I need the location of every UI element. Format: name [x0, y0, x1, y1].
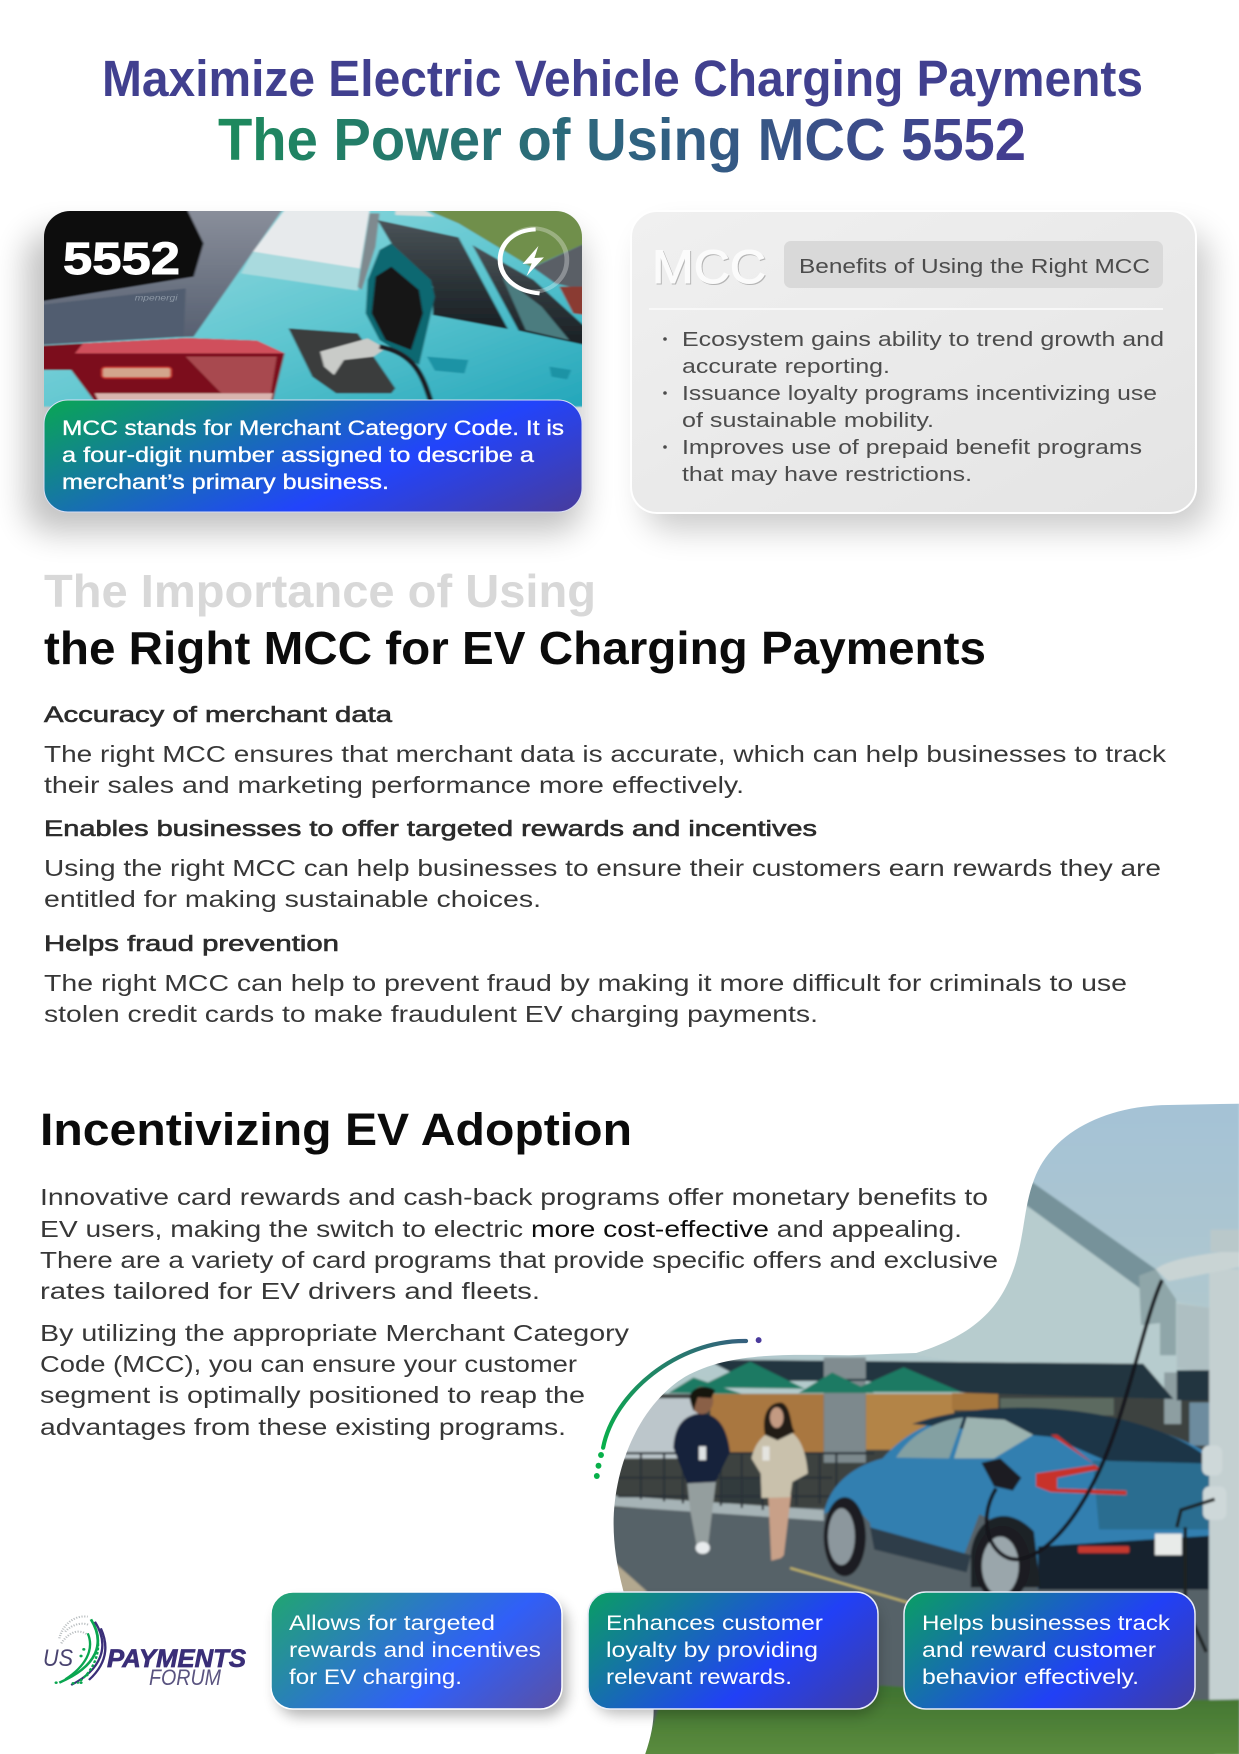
photo: car charging [40, 207, 589, 407]
text block: appropriate MCC: Code (MCC), you can ensure your customer [40, 1351, 577, 1377]
panel: what MCC stands for [26, 207, 589, 532]
card: targeted rewards: Allows for targeted [289, 1612, 495, 1635]
badge: 5552: 5552 [63, 233, 180, 284]
text block: card rewards: EV users, making the switch to electric more cost-effective and appealing. [40, 1216, 962, 1242]
benefits list: Ecosystem gains ability to trend growth and [682, 329, 1164, 351]
text block: appropriate MCC: advantages from these existing programs. [40, 1414, 566, 1440]
logo: US Payments Forum [43, 1616, 246, 1690]
benefits list: Improves use of prepaid benefit programs [682, 437, 1142, 459]
benefits list: that may have restrictions. [682, 464, 972, 486]
chip heading [784, 241, 1163, 288]
card: track and reward behavior [904, 1592, 1195, 1709]
callout: MCC definition: a four-digit number assigned to describe a [62, 444, 534, 467]
benefits list: Issuance loyalty programs incentivizing use [682, 383, 1157, 405]
MCC embossed label: MCC [653, 241, 767, 294]
heading: importance of the right MCC: The Importance of Using [44, 565, 596, 617]
callout: MCC definition: merchant’s primary business. [62, 471, 389, 494]
text block: accuracy of merchant data [44, 702, 1167, 798]
card: track and reward behavior: behavior effectively. [922, 1666, 1139, 1689]
text block: accuracy of merchant data: their sales and marketing performance more effectively. [44, 772, 744, 798]
card: targeted rewards [271, 1592, 567, 1716]
card: targeted rewards: for EV charging. [289, 1666, 462, 1689]
benefits list: accurate reporting. [682, 356, 890, 378]
text block: fraud prevention: stolen credit cards to make fraudulent EV charging payments. [44, 1001, 818, 1027]
text block: targeted rewards: entitled for making sustainable choices. [44, 886, 541, 912]
heading: importance of the right MCC [44, 565, 986, 674]
text block: appropriate MCC: segment is optimally positioned to reap the [40, 1382, 585, 1408]
icon: charging [500, 228, 567, 293]
logo: US Payments Forum: PAYMENTS [107, 1645, 246, 1673]
card: customer loyalty: Enhances customer [606, 1612, 823, 1635]
text block: fraud prevention [44, 931, 1127, 1027]
title [102, 50, 1143, 173]
benefits list [663, 329, 1164, 486]
card: customer loyalty [588, 1592, 878, 1714]
text block: card rewards: There are a variety of card programs that provide specific offers and exclusive [40, 1247, 998, 1273]
text block: appropriate MCC [40, 1320, 630, 1440]
decorative arc with dots [594, 1337, 762, 1479]
MCC embossed label: MCC [652, 240, 766, 293]
card: customer loyalty: loyalty by providing [606, 1639, 818, 1662]
card: targeted rewards: rewards and incentives [289, 1639, 541, 1662]
photo: car charging: mpenergi [135, 293, 179, 303]
card: track and reward behavior: and reward customer [922, 1639, 1156, 1662]
text block: targeted rewards: Enables businesses to offer targeted rewards and incentives [44, 816, 817, 841]
logo: US Payments Forum: FORUM [149, 1665, 222, 1690]
text block: card rewards: rates tailored for EV drivers and fleets. [40, 1278, 540, 1304]
chip heading: Benefits of Using the Right MCC [799, 256, 1150, 278]
photo: EV charging outside a cafe [605, 1097, 1239, 1754]
text block: accuracy of merchant data: The right MCC ensures that merchant data is accurate, which can help businesses to track [44, 741, 1167, 767]
callout: MCC definition [44, 400, 582, 512]
heading: importance of the right MCC: the Right MCC for EV Charging Payments [44, 622, 986, 674]
card: customer loyalty: relevant rewards. [606, 1666, 792, 1689]
text block: appropriate MCC: By utilizing the appropriate Merchant Category [40, 1320, 630, 1346]
title: Maximize Electric Vehicle Charging Payments [102, 50, 1143, 107]
text block: accuracy of merchant data: Accuracy of merchant data [44, 702, 393, 727]
title: The Power of Using MCC 5552 [218, 107, 1026, 173]
benefits list: of sustainable mobility. [682, 410, 934, 432]
logo swoosh [55, 1616, 105, 1685]
text block: fraud prevention: The right MCC can help to prevent fraud by making it more difficult for criminals to use [44, 970, 1127, 996]
text block: targeted rewards [44, 816, 1161, 912]
heading: incentivizing EV adoption: Incentivizing EV Adoption [40, 1104, 632, 1155]
panel: benefits of using the right MCC [631, 211, 1209, 530]
card: track and reward behavior: Helps businesses track [922, 1612, 1171, 1635]
callout: MCC definition: MCC stands for Merchant Category Code. It is [62, 417, 564, 440]
text block: card rewards [40, 1184, 998, 1304]
text block: targeted rewards: Using the right MCC can help businesses to ensure their customers earn rewards they are [44, 855, 1161, 881]
text block: fraud prevention: Helps fraud prevention [44, 931, 339, 956]
logo: US Payments Forum: US [43, 1645, 73, 1672]
text block: card rewards: Innovative card rewards and cash-back programs offer monetary benefits to [40, 1184, 988, 1210]
